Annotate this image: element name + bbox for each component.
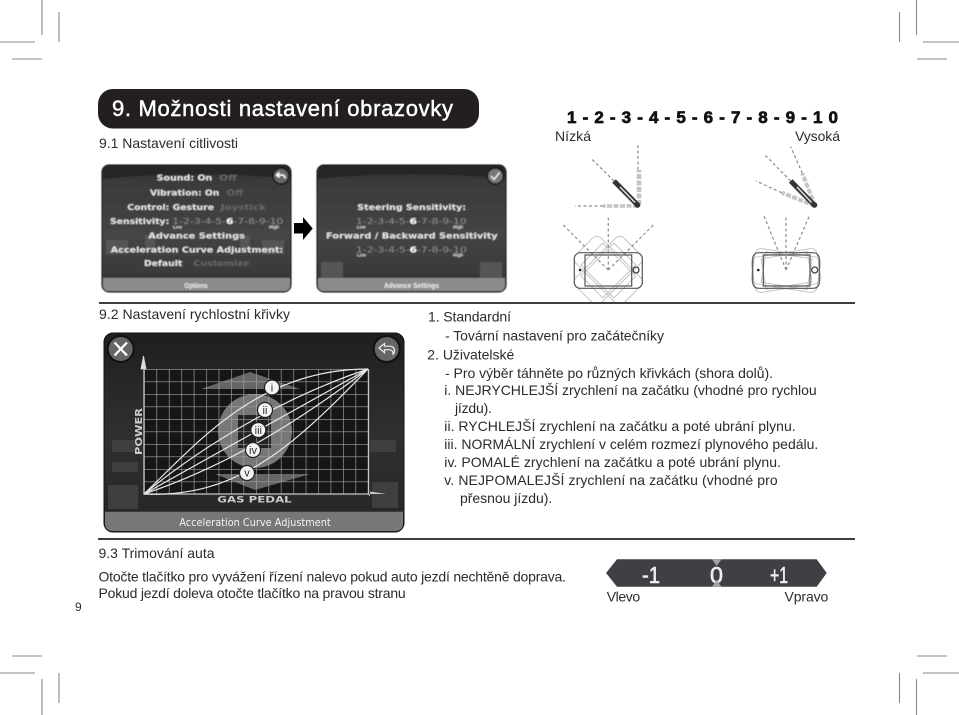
panel: options screen: Off [227,188,244,197]
panel: advance settings screen [317,165,506,292]
panel: advance settings screen: Low [357,224,366,230]
text block: curve descriptions: iii. NORMÁLNÍ zrychlení v celém rozmezí plynového pedálu. [444,436,818,452]
title [98,89,479,128]
arrow [294,217,313,240]
trim control [606,559,829,605]
panel: options screen: 1-2-3-4-5- 6-7-8-9-10 [172,217,283,226]
panel: options screen: Acceleration Curve Adjustment: [111,246,283,255]
panel: advance settings screen: High [453,224,463,230]
icon: close button [108,336,134,362]
text block: curve descriptions [427,308,818,506]
text block: curve descriptions: - Tovární nastavení pro začátečníky [445,328,664,344]
text block: curve descriptions: jízdu). [454,400,492,416]
axis label: gas pedal: GAS PEDAL [217,496,292,506]
curve markers: i [271,382,273,394]
panel: acceleration curve [104,333,404,532]
panel: options screen: High [269,224,279,230]
trim control: +1 [770,562,788,588]
heading: 9.2: 9.2 Nastavení rychlostní křivky [99,306,290,322]
panel: options screen: Sound: On [157,174,213,183]
text block: curve descriptions: v. NEJPOMALEJŠÍ zrychlení na začátku (vhodné pro [444,472,778,488]
curve markers: ii [263,405,267,417]
text block: curve descriptions: ii. RYCHLEJŠÍ zrychlení na začátku a poté ubrání plynu. [444,418,796,434]
heading: 9.1: 9.1 Nastavení citlivosti [99,135,238,151]
sensitivity scale: Vysoká [795,128,840,144]
panel: options screen: Options [184,281,208,290]
panel: options screen: Low [173,224,182,230]
icon: back button [374,336,400,362]
panel: options screen: Vibration: On [150,188,220,197]
trim control: Vlevo [607,589,640,605]
panel: options screen: Joystick [219,203,267,212]
sensitivity scale [555,108,840,144]
panel: options screen [102,165,291,292]
diagram: high sensitivity side view [756,147,817,208]
panel: options screen: Default [144,259,182,268]
text block: curve descriptions: 2. Uživatelské [427,346,515,362]
curve markers [240,380,280,480]
text block: curve descriptions: 1. Standardní [428,308,511,324]
panel: options screen: Off [219,174,237,183]
text block: curve descriptions: iv. POMALÉ zrychlení na začátku a poté ubrání plynu. [444,454,781,470]
sensitivity scale: 1 - 2 - 3 - 4 - 5 - 6 - 7 - 8 - 9 - 1 0 [567,108,838,127]
panel: advance settings screen: Low [357,252,366,258]
icon: check button [487,168,503,184]
panel: options screen: Sensitivity: [110,217,169,226]
text block: trim instructions [98,568,566,601]
icon: back button [273,168,289,184]
panel: advance settings screen: High [453,252,463,258]
title: 9. Možnosti nastavení obrazovky [112,96,453,121]
diagram: low sensitivity side view [575,144,640,208]
axis label: power: POWER [134,408,145,455]
page number: 9 [75,600,82,614]
panel caption: Acceleration Curve Adjustment [179,516,331,529]
panel: options screen: Control: Gesture [127,203,215,212]
diagram: low sensitivity phone [563,216,653,307]
panel: advance settings screen: Forward / Backward Sensitivity [326,231,499,240]
text block: trim instructions: Otočte tlačítko pro vyvážení řízení nalevo pokud auto jezdí nechtěně doprava. [98,568,566,584]
panel: options screen: Customize [193,259,250,268]
text block: trim instructions: Pokud jezdí doleva otočte tlačítko na pravou stranu [98,585,406,601]
trim control: -1 [642,562,660,588]
text block: curve descriptions: - Pro výběr táhněte po různých křivkách (shora dolů). [445,365,773,381]
panel: options screen: Advance Settings [148,231,245,240]
trim control: Vpravo [784,589,829,605]
panel: advance settings screen: 1-2-3-4-5- 6-7-8-9-10 [356,245,467,254]
panel: advance settings screen: 1-2-3-4-5- 6-7-8-9-10 [356,217,467,226]
curve markers: v [244,468,250,480]
sensitivity scale: Nízká [555,128,591,144]
curve markers: iv [249,445,257,457]
speed curves [144,369,368,494]
diagram: high sensitivity phone [750,216,822,293]
text block: curve descriptions: i. NEJRYCHLEJŠÍ zrychlení na začátku (vhodné pro rychlou [444,382,817,398]
panel: advance settings screen: Advance Settings [384,281,439,290]
curve markers: iii [255,425,262,437]
trim control: 0 [710,562,723,588]
text block: curve descriptions: přesnou jízdu). [460,490,552,506]
panel: advance settings screen: Steering Sensitivity: [357,203,466,212]
heading: 9.3: 9.3 Trimování auta [98,545,215,561]
